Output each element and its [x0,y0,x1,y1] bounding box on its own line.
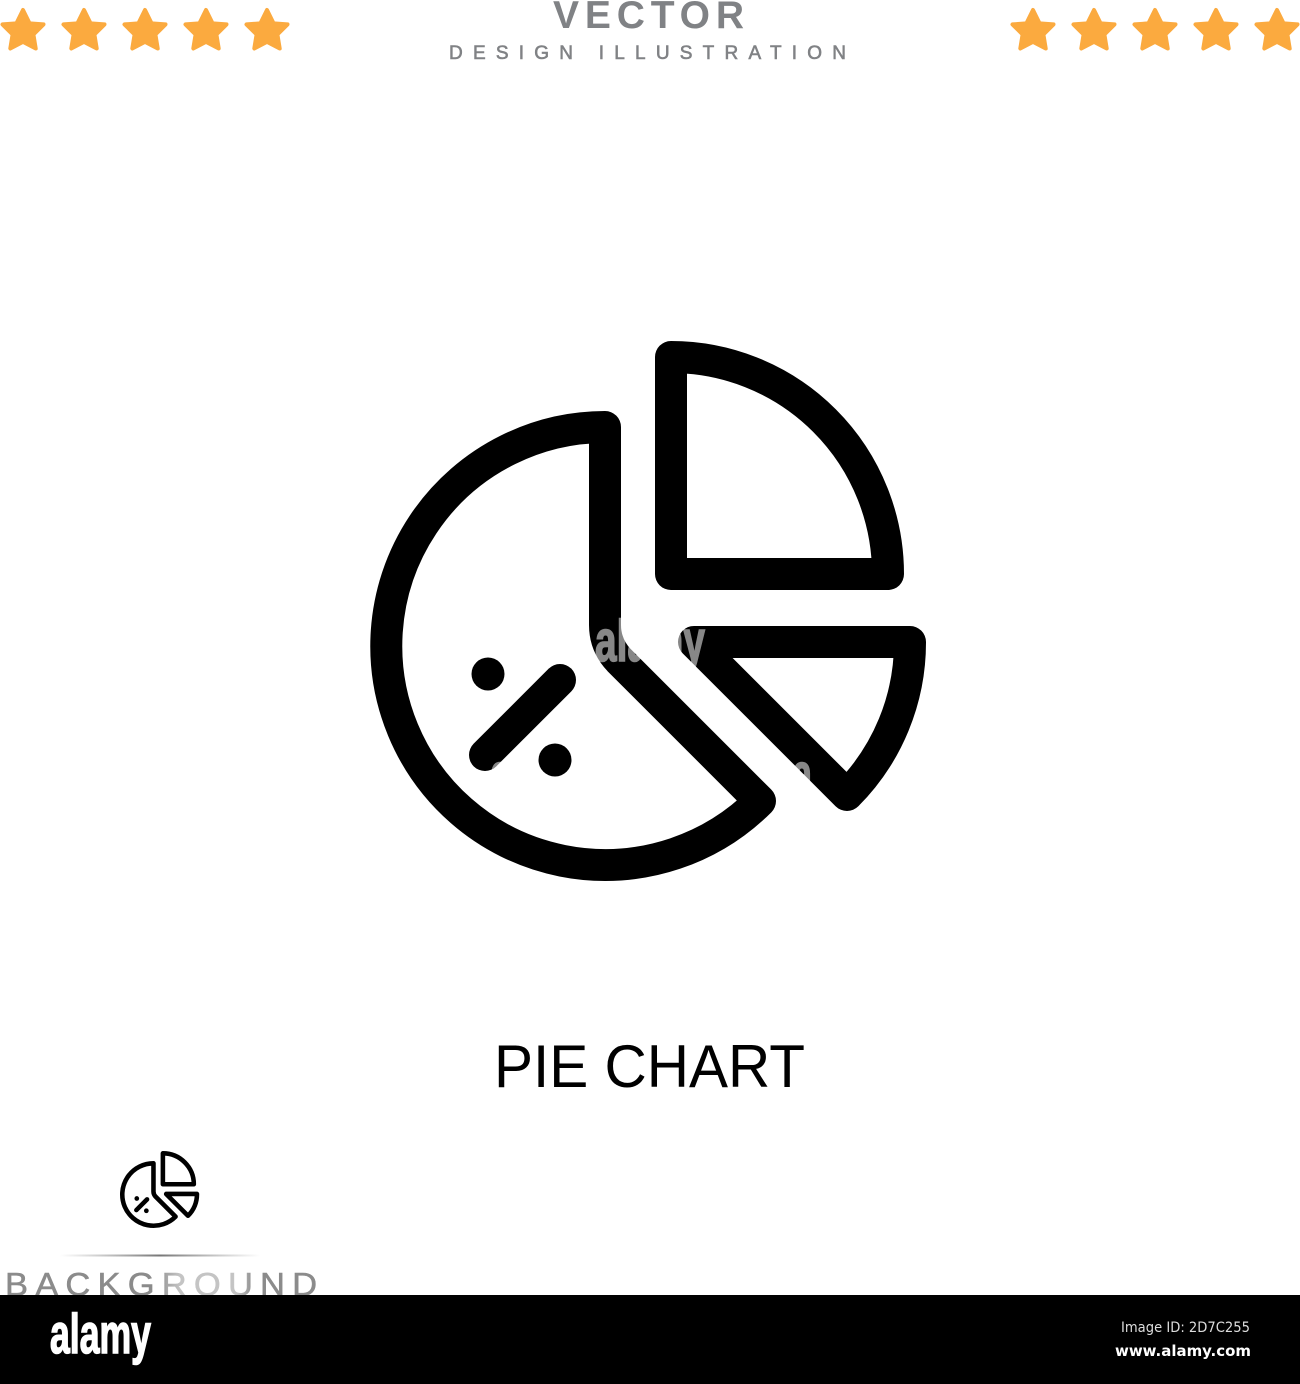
subheading: DESIGN ILLUSTRATION: DESIGN ILLUSTRATION [449,43,846,64]
footer bar [0,1295,1300,1384]
watermark: alamy over the icon: a [490,742,510,807]
label: BACKGROUND: BACKGROUND [5,1268,317,1303]
icon: small pie chart [122,1153,197,1226]
watermark: alamy over the icon: alamy [595,609,705,674]
watermark: alamy over the icon: a [792,742,812,807]
watermark: alamy over the icon [490,609,812,807]
logo: alamy: alamy [50,1302,151,1365]
main pie slice with percent sign [386,427,760,865]
percent sign [472,658,572,776]
image id: Image ID: 2D7C255 [1121,1320,1250,1336]
lower right wedge slice [694,642,910,795]
website: www.alamy.com [1115,1342,1251,1360]
upper right quarter slice [671,357,888,574]
icon: large pie chart [386,357,910,865]
stars: left rating row [2,10,288,48]
title: PIE CHART: PIE CHART [494,1033,805,1100]
stars: right rating row [1012,10,1298,48]
divider line above BACKGROUND [60,1254,260,1256]
